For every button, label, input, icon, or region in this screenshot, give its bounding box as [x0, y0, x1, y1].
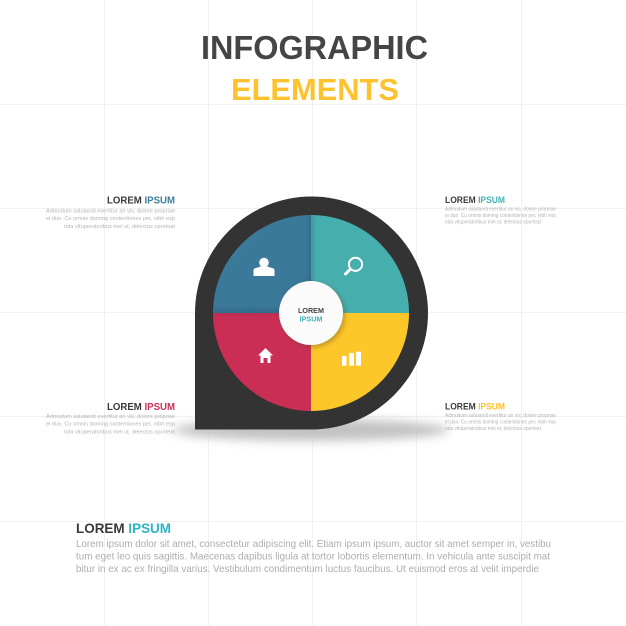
text block: top right: nda vituperatoribus mei ut, delectus oporteat: [445, 220, 541, 226]
teardrop circle chart: [195, 196, 428, 430]
text block: bottom left: LOREM IPSUM: [107, 402, 175, 413]
title: [201, 30, 428, 107]
center circle: LOREM: [298, 306, 324, 315]
text block: top left: Admodum salutandi evertitur an vis, dolore propriae: [46, 208, 175, 214]
center circle: [279, 281, 343, 345]
text block: main description: tum eget leo quis sagittis. Maecenas dapibus ligula at tortor lobortis elementum. In vehicula ante suscipit mat: [76, 552, 550, 562]
text block: top right: [445, 195, 556, 226]
title: INFOGRAPHIC: [201, 30, 428, 67]
segment: blue: [213, 215, 311, 313]
text block: bottom left: [46, 402, 176, 436]
text block: bottom left: Admodum salutandi evertitur an vis, dolore propriae: [46, 414, 175, 420]
quadrants: [213, 215, 409, 411]
text block: top left: nda vituperatoribus mei ut, delectus oporteat: [64, 224, 176, 230]
text block: top right: LOREM IPSUM: [445, 195, 505, 205]
text block: main description: LOREM IPSUM: [76, 520, 171, 536]
text block: top left: ei duo. Cu omnis doming contentiones per, nibh exp: [46, 216, 175, 222]
segment: red: [213, 313, 311, 411]
ground shadow: [173, 419, 449, 441]
text block: main description: Lorem ipsum dolor sit amet, consectetur adipiscing elit. Etiam ipsum ipsum, auctor sit amet semper in, vestibu: [76, 539, 551, 550]
text block: top right: Admodum salutandi evertitur an vis, dolore propriae: [445, 206, 556, 212]
text block: bottom right: ei duo. Cu omnis doming contentiones per, nibh exp: [445, 420, 556, 426]
icon: bar chart: [342, 352, 361, 366]
segment: yellow: [311, 313, 409, 411]
text block: bottom right: [445, 402, 556, 432]
icon: house: [258, 348, 273, 363]
title: ELEMENTS: [231, 72, 399, 107]
center shadow: [280, 282, 346, 348]
segment: teal: [311, 215, 409, 313]
text block: main description: [76, 520, 551, 575]
icon: magnifier: [346, 258, 362, 274]
text block: top left: [46, 196, 176, 230]
text block: bottom right: Admodum salutandi evertitur an vis, dolore propriae: [445, 413, 556, 419]
icon: person: [254, 258, 274, 276]
dark teardrop backing: [195, 196, 428, 430]
text block: bottom right: nda vituperatoribus mei ut, delectus oporteat: [445, 426, 541, 432]
text block: bottom right: LOREM IPSUM: [445, 402, 505, 412]
text block: top right: ei duo. Cu omnis doming contentiones per, nibh exp: [445, 213, 556, 219]
text block: bottom left: nda vituperatoribus mei ut, delectus oporteat: [64, 430, 176, 436]
text block: top left: LOREM IPSUM: [107, 196, 175, 206]
text block: bottom left: ei duo. Cu omnis doming contentiones per, nibh exp: [46, 422, 175, 428]
text block: main description: bitur in ex ac ex fringilla varius. Vestibulum condimentum luctus faucibus. Ut euismod eros at velit imperdie: [76, 564, 539, 575]
center circle: IPSUM: [300, 314, 322, 324]
